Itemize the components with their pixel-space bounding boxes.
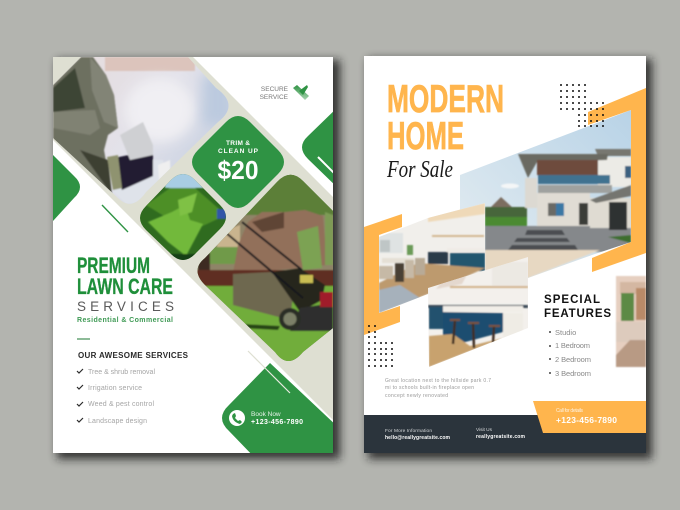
flyer: lawn care xyxy=(53,57,333,453)
orange frame: left xyxy=(364,214,402,335)
heading: modern home: HOME xyxy=(387,115,464,158)
secure service logo: SECURE xyxy=(261,86,289,93)
services list: Landscape design xyxy=(88,418,147,425)
shadow: right flyer xyxy=(368,59,652,459)
heading: modern home: MODERN xyxy=(387,78,504,121)
badge: trim and clean up price: $20 xyxy=(218,155,258,185)
footer bar: Visit Us xyxy=(476,427,493,433)
photo: leaf spray xyxy=(140,174,226,260)
badge: trim and clean up price xyxy=(192,116,284,208)
special features xyxy=(544,294,611,378)
book now panel xyxy=(222,351,340,460)
badge: trim and clean up price: TRIM & xyxy=(226,140,250,147)
short divider xyxy=(77,338,90,340)
icon: phone xyxy=(229,410,245,426)
shadow: left flyer xyxy=(57,60,340,459)
services list xyxy=(77,351,189,425)
photo: kitchen xyxy=(428,255,528,370)
special features: 3 Bedroom xyxy=(555,369,591,378)
photo: house exterior xyxy=(460,105,635,280)
heading: modern home: For Sale xyxy=(386,157,453,183)
special features: Studio xyxy=(555,328,576,337)
heading: premium lawn care: Residential & Commercial xyxy=(77,317,173,324)
special features: 2 Bedroom xyxy=(555,355,591,364)
accent: green line xyxy=(102,205,128,232)
services list: Weed & pest control xyxy=(88,401,154,408)
photo: sofa interior xyxy=(616,276,646,367)
secure service logo xyxy=(260,85,309,101)
secure service logo: SERVICE xyxy=(260,94,289,101)
accent: left green shape xyxy=(45,147,80,229)
mockup canvas xyxy=(50,52,659,466)
dot pattern: left xyxy=(368,325,393,367)
icon: squeegee xyxy=(293,85,309,100)
flyer: modern home xyxy=(364,56,646,453)
special features: 1 Bedroom xyxy=(555,341,590,350)
book now panel: +123-456-7890 xyxy=(251,419,303,426)
heading: premium lawn care: SERVICES xyxy=(77,299,174,314)
beige diagonal band xyxy=(53,57,340,430)
call for details panel: Call for details xyxy=(556,408,584,414)
icon: squeegee handle xyxy=(299,85,308,95)
photo: dining room xyxy=(379,200,485,315)
photo: fogging worker xyxy=(53,57,228,204)
accent: right green shape xyxy=(302,105,340,190)
badge: trim and clean up price: CLEAN UP xyxy=(218,148,259,155)
orange frame: top right xyxy=(588,88,646,272)
footer bar xyxy=(364,415,646,453)
footer bar: hello@reallygreatsite.com xyxy=(385,435,451,441)
services list: Tree & shrub removal xyxy=(88,369,155,376)
services list: Irrigation service xyxy=(88,385,142,392)
heading: premium lawn care: LAWN CARE xyxy=(77,274,173,299)
special features: SPECIAL xyxy=(544,294,600,306)
footer bar: reallygreatsite.com xyxy=(476,434,526,440)
description text: mi to schools built-in fireplace open xyxy=(385,385,474,391)
photo: lawn mower xyxy=(198,174,333,361)
description text: Great location next to the hillside park 0.7 xyxy=(385,378,491,384)
dot pattern: top right xyxy=(560,84,604,127)
footer bar: For More Information xyxy=(385,428,432,434)
description text: concept newly renovated xyxy=(385,393,448,399)
heading: premium lawn care xyxy=(77,253,174,324)
services list: OUR AWESOME SERVICES xyxy=(78,351,189,360)
book now panel: Book Now xyxy=(251,411,281,418)
heading: premium lawn care: PREMIUM xyxy=(77,253,150,278)
special features: FEATURES xyxy=(544,308,611,320)
heading: modern home xyxy=(386,78,504,183)
description text xyxy=(385,378,491,399)
call for details panel: +123-456-7890 xyxy=(556,415,617,425)
call for details panel xyxy=(533,401,646,433)
